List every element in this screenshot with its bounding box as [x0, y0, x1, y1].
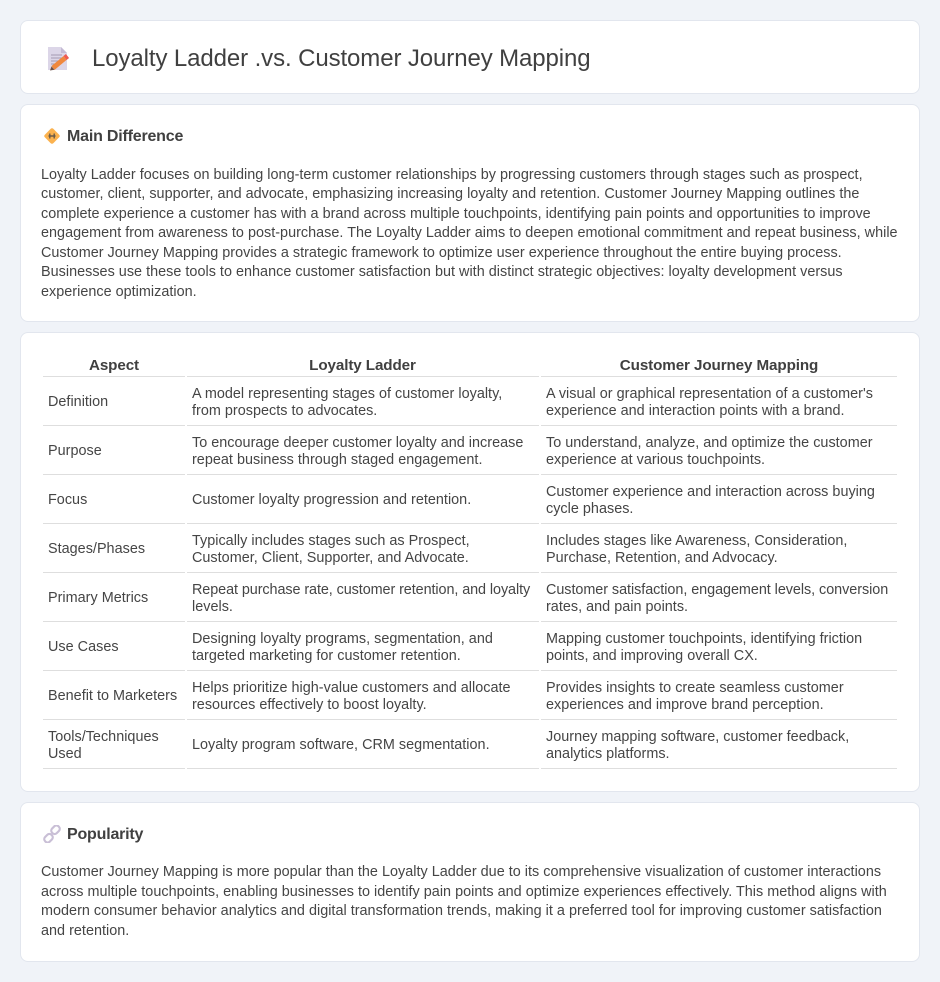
row: stages/phases: Purchase, Retention, and Advocacy.	[546, 550, 778, 566]
icon: warning diamond	[44, 128, 60, 144]
row: primary metrics	[48, 582, 888, 615]
heading: main difference: Main Difference	[67, 128, 183, 145]
main difference text: experience optimization.	[41, 284, 197, 300]
row: primary metrics: Repeat purchase rate, customer retention, and loyalty	[192, 582, 530, 598]
row: use cases: Designing loyalty programs, segmentation, and	[192, 631, 493, 647]
row: focus: cycle phases.	[546, 501, 633, 517]
row: stages/phases	[48, 533, 847, 566]
main difference text: customer, client, supporter, and advocate, emphasizing increasing loyalty and retention. Customer Journey Mapping outlines the	[41, 186, 859, 202]
row: focus: Customer experience and interaction across buying	[546, 484, 875, 500]
row: benefit to marketers: Provides insights to create seamless customer	[546, 680, 844, 696]
row: tools/techniques used: Loyalty program software, CRM segmentation.	[192, 737, 490, 753]
panel: comparison table	[20, 332, 920, 792]
icon: chain link	[43, 825, 61, 843]
row: focus	[48, 484, 875, 517]
main difference text: Loyalty Ladder focuses on building long-term customer relationships by progressing customers through stages such as prospect,	[41, 167, 863, 183]
row: use cases: Mapping customer touchpoints, identifying friction	[546, 631, 862, 647]
row: primary metrics: rates, and pain points.	[546, 599, 688, 615]
heading: popularity: Popularity	[67, 826, 143, 843]
row: stages/phases: Typically includes stages such as Prospect,	[192, 533, 470, 549]
table header	[89, 357, 818, 374]
popularity text: Customer Journey Mapping is more popular than the Loyalty Ladder due to its comprehensive visualization of customer interactions	[41, 864, 881, 880]
row: benefit to marketers: experiences and improve brand perception.	[546, 697, 824, 713]
popularity text: and retention.	[41, 923, 129, 939]
row: purpose: To understand, analyze, and optimize the customer	[546, 435, 873, 451]
main difference text	[41, 167, 898, 300]
main difference text: engagement from awareness to post-purchase. The Loyalty Ladder aims to deepen emotional commitment and repeat business, while	[41, 225, 898, 241]
row: tools/techniques used: Tools/Techniques	[48, 729, 159, 745]
row: tools/techniques used: analytics platforms.	[546, 746, 670, 762]
row: primary metrics: Customer satisfaction, engagement levels, conversion	[546, 582, 888, 598]
row: definition: from prospects to advocates.	[192, 403, 377, 419]
row: use cases: Use Cases	[48, 639, 119, 655]
row: definition: A visual or graphical representation of a customer's	[546, 386, 873, 402]
header panel	[20, 20, 920, 94]
row: definition: A model representing stages of customer loyalty,	[192, 386, 502, 402]
row: tools/techniques used	[48, 729, 849, 762]
row: use cases	[48, 631, 862, 664]
row: purpose	[48, 435, 873, 468]
row: use cases: targeted marketing for customer retention.	[192, 648, 461, 664]
row: purpose: Purpose	[48, 443, 102, 459]
table header: Aspect	[89, 357, 139, 374]
row: stages/phases: Stages/Phases	[48, 541, 145, 557]
row: definition	[48, 386, 873, 419]
icon: document with pencil	[48, 47, 69, 70]
main difference text: Businesses use these tools to enhance customer satisfaction but with distinct strategic objectives: loyalty development versus	[41, 264, 843, 280]
row: focus: Focus	[48, 492, 87, 508]
row: tools/techniques used: Journey mapping software, customer feedback,	[546, 729, 849, 745]
popularity text	[41, 864, 887, 939]
row: purpose: To encourage deeper customer loyalty and increase	[192, 435, 523, 451]
row: tools/techniques used: Used	[48, 746, 82, 762]
popularity text: modern consumer behavior analytics and digital transformation trends, making it a preferred tool for improving customer satisfaction	[41, 903, 882, 919]
row: benefit to marketers: Benefit to Marketers	[48, 688, 177, 704]
row: focus: Customer loyalty progression and retention.	[192, 492, 471, 508]
row: benefit to marketers: resources effectively to boost loyalty.	[192, 697, 427, 713]
row: definition: experience and interaction points with a brand.	[546, 403, 845, 419]
row: purpose: repeat business through staged engagement.	[192, 452, 482, 468]
row: stages/phases: Includes stages like Awareness, Consideration,	[546, 533, 847, 549]
row: primary metrics: Primary Metrics	[48, 590, 148, 606]
table header: Loyalty Ladder	[309, 357, 416, 374]
panel: popularity	[20, 802, 920, 962]
main difference text: complete experience a customer has with a brand across multiple touchpoints, identifying pain points and opportunities to improve	[41, 206, 871, 222]
main difference text: Customer Journey Mapping provides a strategic framework to optimize user experience throughout the entire buying process.	[41, 245, 842, 261]
panel: main difference	[20, 104, 920, 322]
row: primary metrics: levels.	[192, 599, 233, 615]
table header: Customer Journey Mapping	[620, 357, 818, 374]
row: purpose: experience at various touchpoints.	[546, 452, 765, 468]
popularity text: across multiple touchpoints, enabling businesses to identify pain points and optimize experiences effectively. This method aligns with	[41, 884, 887, 900]
row: benefit to marketers: Helps prioritize high-value customers and allocate	[192, 680, 511, 696]
row: use cases: points, and improving overall CX.	[546, 648, 758, 664]
row: definition: Definition	[48, 394, 108, 410]
row: benefit to marketers	[48, 680, 844, 713]
row: stages/phases: Customer, Client, Supporter, and Advocate.	[192, 550, 469, 566]
title: Loyalty Ladder .vs. Customer Journey Mapping	[92, 45, 591, 72]
